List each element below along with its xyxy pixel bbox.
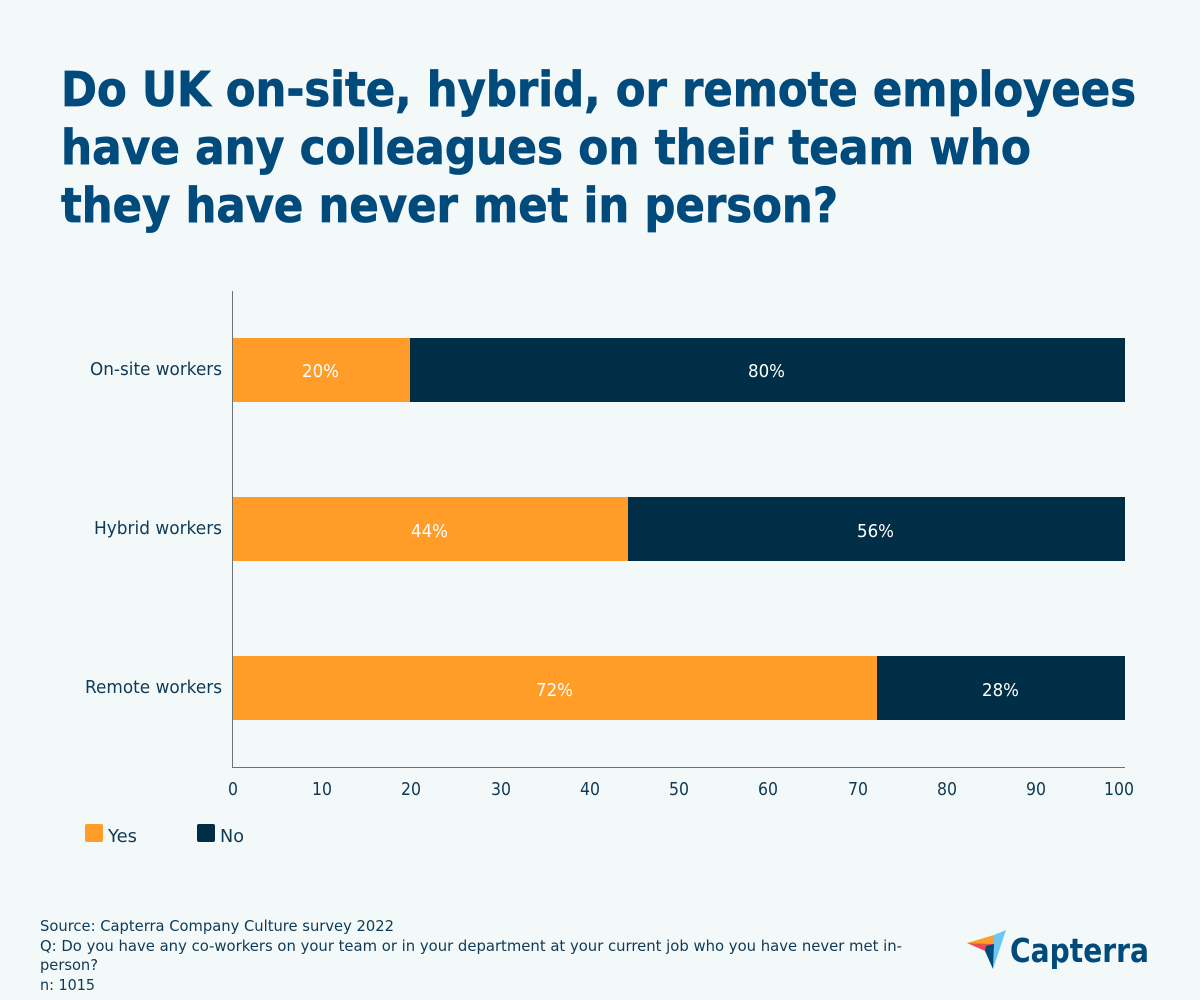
x axis labels <box>228 780 1134 800</box>
bar: hybrid workers: 44% <box>411 522 448 542</box>
x axis labels: 30 <box>491 780 511 800</box>
category labels: Remote workers <box>85 678 222 698</box>
bar: on-site workers: 20% <box>302 362 339 382</box>
source note <box>40 917 902 994</box>
x axis labels: 40 <box>580 780 600 800</box>
legend <box>85 824 244 847</box>
title <box>61 62 1136 234</box>
x axis labels: 50 <box>669 780 689 800</box>
bar: remote workers: 72% <box>536 681 573 701</box>
category labels <box>85 360 222 698</box>
x axis labels: 70 <box>848 780 868 800</box>
x axis labels: 90 <box>1026 780 1046 800</box>
x axis labels: 20 <box>401 780 421 800</box>
x axis labels: 0 <box>228 780 238 800</box>
category labels: On-site workers <box>90 360 222 380</box>
source note: n: 1015 <box>40 976 95 994</box>
legend: Yes <box>107 827 137 847</box>
category labels: Hybrid workers <box>94 519 222 539</box>
bar: remote workers: 28% <box>982 681 1019 701</box>
x axis labels: 100 <box>1104 780 1134 800</box>
bar: hybrid workers <box>233 497 1125 561</box>
icon: paper plane <box>967 930 1006 969</box>
source note: person? <box>40 956 98 974</box>
bar: hybrid workers: 56% <box>857 522 894 542</box>
x axis labels: 10 <box>312 780 332 800</box>
source note: Q: Do you have any co-workers on your team or in your department at your current job who you have never met in- <box>40 937 902 955</box>
axis lines <box>232 291 1125 768</box>
bar: on-site workers <box>233 338 1125 402</box>
x axis labels: 60 <box>758 780 778 800</box>
x axis labels: 80 <box>937 780 957 800</box>
logo: Capterra <box>967 930 1149 970</box>
bar: remote workers <box>233 656 1125 720</box>
legend: No <box>220 827 244 847</box>
logo: Capterra: Capterra <box>1010 931 1149 970</box>
title: they have never met in person? <box>61 178 838 234</box>
bar: on-site workers: 80% <box>748 362 785 382</box>
chart: stacked bars <box>85 291 1134 800</box>
title: have any colleagues on their team who <box>61 120 1031 176</box>
source note: Source: Capterra Company Culture survey 2022 <box>40 917 394 935</box>
